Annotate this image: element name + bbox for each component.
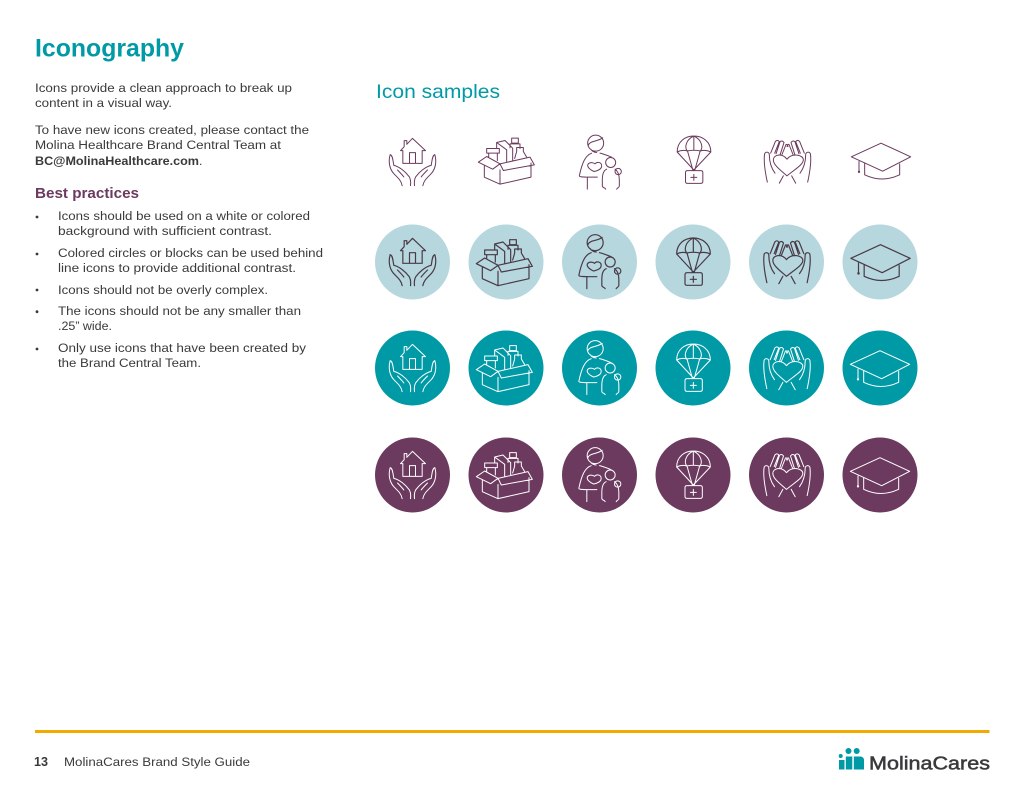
footer guide title: MolinaCares Brand Style Guide <box>64 755 250 769</box>
plum circle icon: graduation cap <box>842 438 918 512</box>
light circle icon: graduation cap <box>842 224 918 300</box>
icon row: plum circles <box>375 438 918 512</box>
plum circle icon: hands with heart <box>749 438 824 512</box>
text block: introduction: . <box>199 154 202 168</box>
footer rule <box>35 730 990 733</box>
icon: hands with heart <box>764 140 811 183</box>
icon: graduation cap <box>851 143 911 179</box>
icon row: plain line icons <box>389 135 911 189</box>
text block: introduction: Molina Healthcare Brand Central Team at <box>35 138 282 152</box>
text block: introduction: To have new icons created, please contact the <box>35 123 309 137</box>
icon row: light blue circles <box>375 224 918 300</box>
plum circle icon: supply box <box>468 438 544 512</box>
logo wordmark: MolinaCares <box>869 754 990 774</box>
light circle icon: house in hands <box>375 224 450 300</box>
footer page number: 13 <box>34 755 48 769</box>
plum circle icon: parachute aid <box>656 438 730 512</box>
bullet list: best practices: line icons to provide additional contrast. <box>58 261 296 275</box>
icon: parachute aid <box>677 136 711 183</box>
icon row: teal circles <box>375 330 918 406</box>
heading: best practices: Best practices <box>35 185 139 202</box>
logo mark: family figures <box>839 748 864 770</box>
teal circle icon: parent and child <box>562 330 637 406</box>
logo: MolinaCares <box>839 748 990 774</box>
light circle icon: parachute aid <box>656 224 730 300</box>
bullet list: best practices: Icons should be used on a white or colored <box>58 209 310 223</box>
plum circle icon: house in hands <box>375 438 450 512</box>
light circle icon: parent and child <box>562 224 637 300</box>
bullet list: best practices: .25” wide. <box>58 319 112 333</box>
bullet list: best practices: Colored circles or blocks can be used behind <box>58 246 323 260</box>
teal circle icon: graduation cap <box>842 330 918 406</box>
teal circle icon: parachute aid <box>656 330 730 406</box>
teal circle icon: hands with heart <box>749 330 824 406</box>
title: Iconography <box>35 34 184 62</box>
bullet list: best practices: background with sufficient contrast. <box>58 224 272 238</box>
text block: introduction: BC@MolinaHealthcare.com <box>35 154 199 168</box>
light circle icon: hands with heart <box>749 224 824 300</box>
bullet list: best practices: Only use icons that have been created by <box>58 341 307 355</box>
plum circle icon: parent and child <box>562 438 637 512</box>
teal circle icon: supply box <box>468 330 544 406</box>
bullet list: best practices: Icons should not be overly complex. <box>58 283 268 297</box>
text block: introduction <box>35 81 309 168</box>
heading: icon samples: Icon samples <box>376 81 500 103</box>
icon: supply box <box>478 138 534 184</box>
text block: introduction: content in a visual way. <box>35 96 172 110</box>
teal circle icon: house in hands <box>375 330 450 406</box>
bullet list: best practices: The icons should not be any smaller than <box>58 304 301 318</box>
text block: introduction: Icons provide a clean approach to break up <box>35 81 292 95</box>
light circle icon: supply box <box>468 224 544 300</box>
bullet list: best practices <box>36 209 323 370</box>
icon: parent and child <box>579 135 621 189</box>
bullet list: best practices: the Brand Central Team. <box>58 356 201 370</box>
icon: house in hands <box>389 138 436 186</box>
